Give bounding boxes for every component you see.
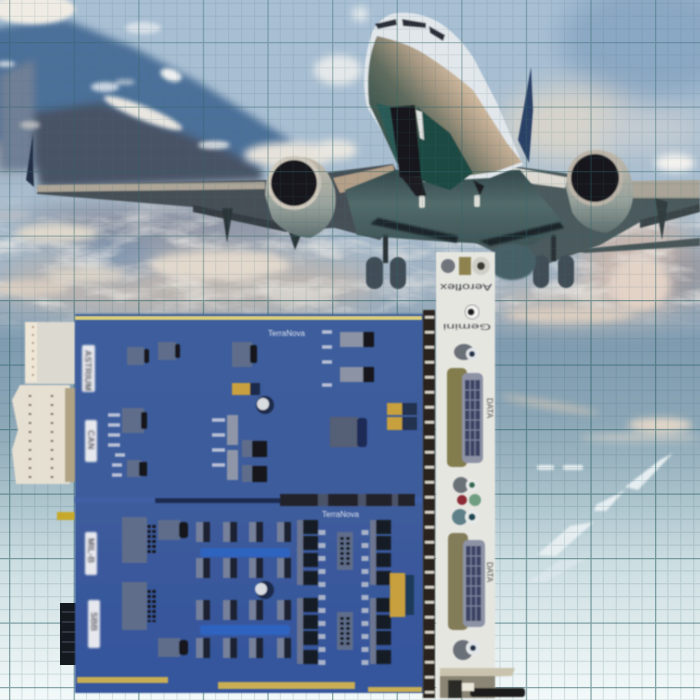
graph paper grid: lower xyxy=(0,300,700,700)
jack screw upper xyxy=(454,344,478,360)
black header connector xyxy=(60,603,84,665)
panel top hardware xyxy=(441,257,490,275)
yellow test connector xyxy=(57,512,75,520)
panel sublabel: Gemini xyxy=(443,322,491,331)
tail stabilizer xyxy=(570,238,700,253)
nose gear and lights xyxy=(400,175,484,208)
left winglet xyxy=(26,133,34,187)
center belly xyxy=(345,170,565,245)
connector: white lower xyxy=(12,385,80,484)
ejector handle xyxy=(440,668,525,698)
left wing xyxy=(37,164,410,250)
connector: white upper xyxy=(25,322,75,384)
gold edge: top xyxy=(75,316,422,320)
board logos: TerraNova xyxy=(322,510,359,519)
panel label upper: DATA xyxy=(485,398,494,419)
electronics board assembly xyxy=(12,252,525,698)
bottom board components xyxy=(122,517,414,665)
connector: upper D-sub xyxy=(447,368,483,467)
tantalum caps xyxy=(390,573,405,617)
clouds and shadow bands xyxy=(0,0,700,442)
white silkscreen labels: SBB xyxy=(89,612,99,632)
runway markings xyxy=(528,453,673,582)
circuit board xyxy=(75,314,424,693)
fuselage xyxy=(364,13,523,190)
jack screw lower xyxy=(453,640,480,660)
white silkscreen labels xyxy=(82,345,100,648)
dark square columns xyxy=(303,520,391,664)
panel brand text: Aeroflex xyxy=(439,282,492,292)
board logos xyxy=(268,329,359,519)
right engine xyxy=(566,150,633,233)
white silkscreen labels: ASTRIUM xyxy=(83,350,93,391)
comb edge connector xyxy=(423,310,435,698)
panel circular marker xyxy=(465,305,479,319)
graph paper grid: upper xyxy=(0,0,700,300)
white silkscreen labels: MIL-B xyxy=(86,538,96,563)
airplane xyxy=(26,13,700,289)
board divider strip xyxy=(75,494,424,506)
mid jacks xyxy=(452,477,481,525)
bright blue bars xyxy=(200,548,290,557)
right tail fin xyxy=(518,67,533,163)
board logos: TerraNova xyxy=(268,329,305,338)
white silkscreen labels: CAN xyxy=(86,430,96,450)
top board components xyxy=(108,332,417,482)
gold edges: bottom xyxy=(77,677,422,692)
rear fuselage xyxy=(488,244,536,280)
right wing xyxy=(470,165,700,270)
panel label lower: DATA xyxy=(485,562,494,583)
main landing gear xyxy=(366,235,574,289)
connector: lower D-sub xyxy=(448,533,485,630)
IC grid xyxy=(196,522,291,658)
left engine xyxy=(265,156,336,238)
front panel xyxy=(436,252,525,698)
